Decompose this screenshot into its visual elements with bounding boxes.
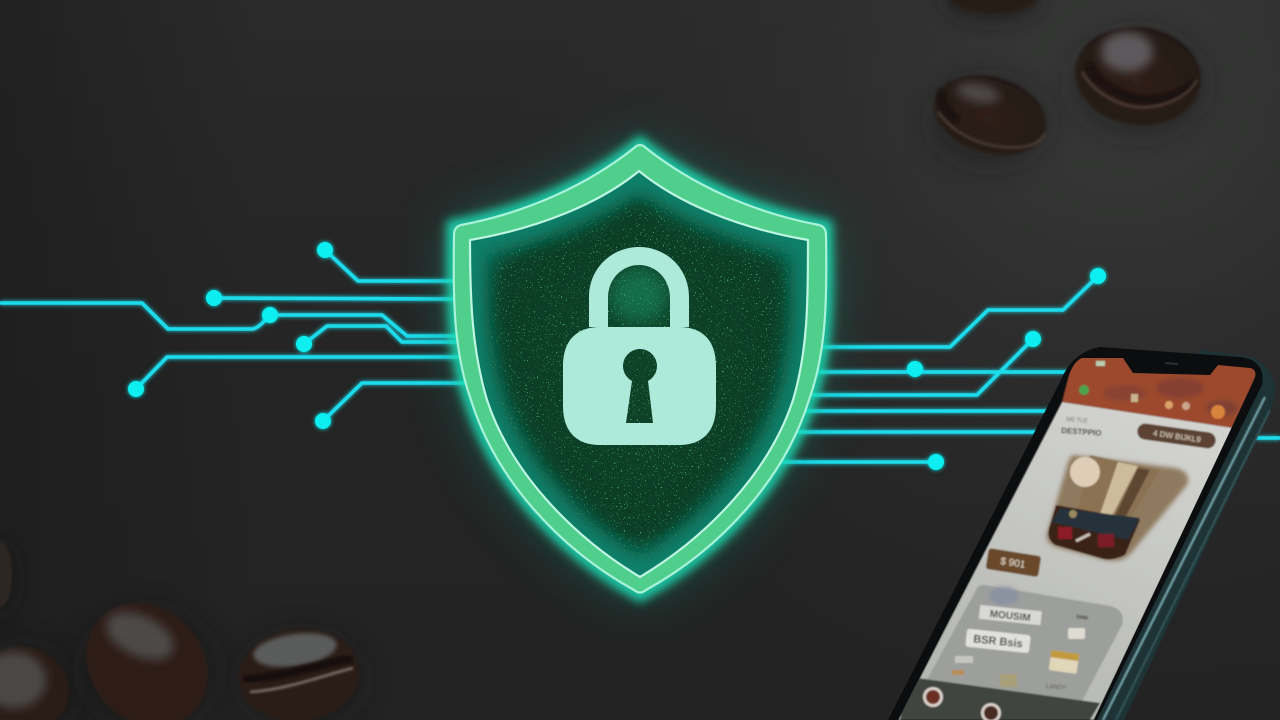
screen: brown pill label: 4 DW BIJKL9: [1153, 429, 1202, 444]
screen: brown pill label: [1136, 423, 1217, 449]
screen: lower gray panel: BSR Bsis: [973, 633, 1023, 650]
screen: bottom navigation bar: [900, 677, 1100, 720]
node dots: right: [907, 268, 1106, 470]
circuit lines: right: [775, 268, 1280, 470]
screen: price button: [986, 548, 1041, 577]
bean: cropped at top edge: [943, 0, 1043, 24]
screen: coffee product image: [1047, 455, 1188, 561]
shield: green band: [454, 145, 826, 592]
bean: lower left: [925, 63, 1055, 167]
icon: padlock: [563, 247, 716, 445]
screen: brown header: [1061, 358, 1256, 428]
coffee beans: bottom left: [0, 540, 366, 720]
circuit lines: left: [0, 242, 470, 429]
phone: side edge: [1080, 350, 1275, 720]
node dots: left: [128, 242, 333, 429]
screen: light background: [898, 402, 1233, 720]
screen: status and title text: DESTPPIO: [1061, 426, 1102, 438]
screen: lower gray panel: MOUSIM: [989, 609, 1031, 624]
screen: lower gray panel: SIME: [1076, 614, 1089, 622]
screen: lower gray panel: [928, 584, 1123, 702]
shield: inner field: [470, 171, 808, 577]
shield: wide ambient glow: [453, 143, 826, 595]
screen: price button: $ 901: [1000, 556, 1026, 571]
screen: status and title text: ME TLE: [1066, 417, 1088, 424]
smartphone with coffee app: [888, 347, 1275, 720]
bean: center large: [61, 578, 233, 720]
screen: lower gray panel: LANDY: [1046, 684, 1066, 691]
bean: left edge upper: [0, 540, 18, 616]
phone: black bezel: [888, 347, 1263, 720]
shield with padlock: [453, 143, 826, 595]
bean: upper right: [1069, 19, 1207, 138]
phone: app screen: [898, 350, 1262, 720]
coffee beans: top right: [925, 0, 1207, 167]
screen: status and title text: [1061, 417, 1102, 438]
bean: left edge lower: [0, 646, 76, 720]
phone: edge highlight: [1103, 397, 1265, 720]
phone: notch speaker: [1165, 363, 1178, 364]
bean: right with crease: [235, 623, 366, 720]
shield: neon halo: [453, 143, 826, 595]
phone: outer edge stripe: [1116, 410, 1270, 720]
